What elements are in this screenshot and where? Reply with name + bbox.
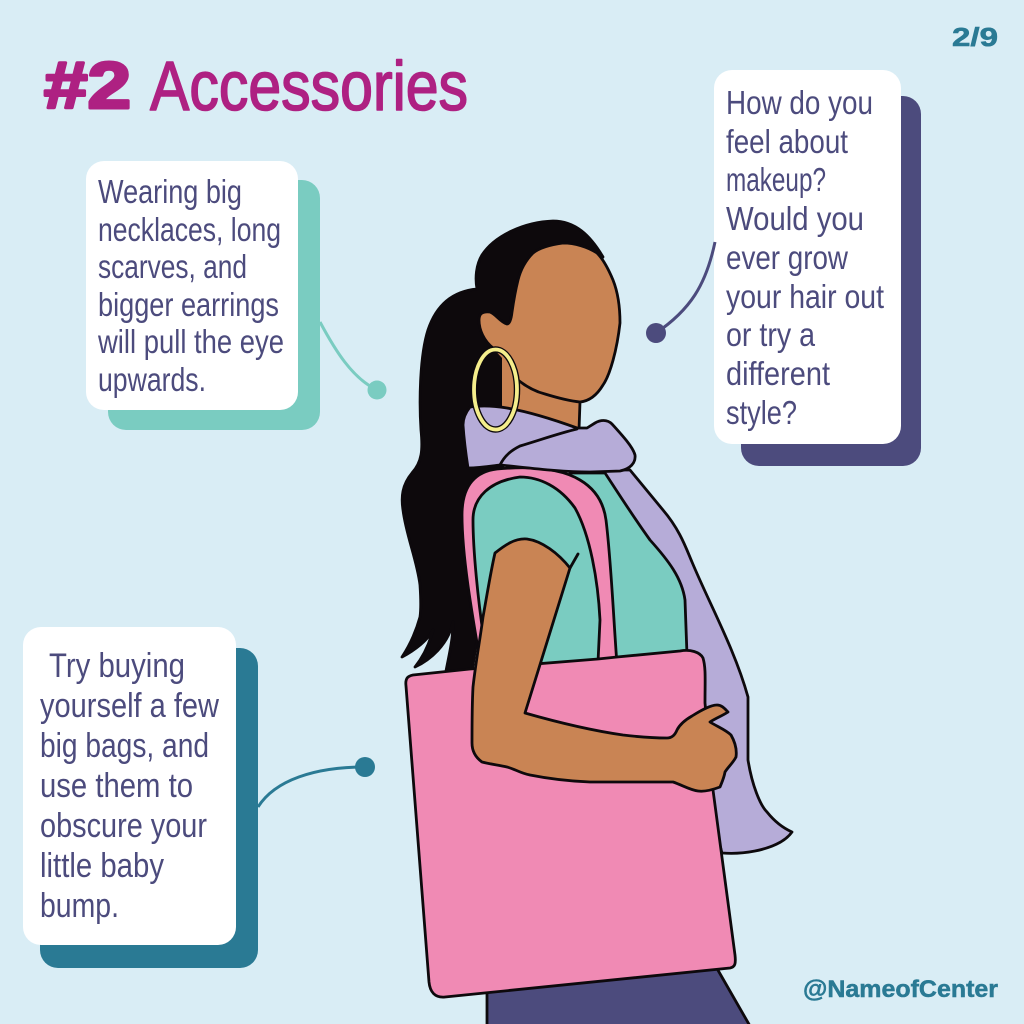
question text <box>726 84 884 431</box>
shirt under strap <box>473 477 600 672</box>
illustration: woman with tote bag and scarf <box>402 221 792 1024</box>
question text: your hair out <box>726 278 884 315</box>
question text: makeup? <box>726 161 826 198</box>
handle: @NameofCenter <box>803 976 998 1003</box>
shirt right panel <box>570 473 687 665</box>
tip text: obscure your <box>40 807 207 845</box>
question text: feel about <box>726 123 848 160</box>
scarf tail <box>600 470 792 853</box>
panel card <box>23 627 236 945</box>
title: #2 <box>44 48 131 122</box>
hoop earring <box>474 350 517 430</box>
panel: necklaces tip <box>86 161 320 430</box>
tip text: scarves, and <box>98 248 247 285</box>
tip text: bump. <box>40 887 119 925</box>
hair <box>402 221 603 672</box>
panel shadow <box>108 180 320 430</box>
connector: necklaces tip <box>320 322 386 400</box>
tip text: upwards. <box>98 361 206 398</box>
tip text: necklaces, long <box>98 211 281 248</box>
tip text: will pull the eye <box>97 323 284 360</box>
question text: Would you <box>726 200 864 237</box>
tote bag <box>406 650 735 997</box>
connector: makeup question <box>646 242 715 343</box>
tip text: big bags, and <box>40 727 209 765</box>
tip text <box>97 173 284 398</box>
panel card <box>714 70 901 444</box>
tip text: bigger earrings <box>98 286 279 323</box>
arm and hand <box>472 539 736 791</box>
panel shadow <box>40 648 258 968</box>
tip text: yourself a few <box>40 687 219 725</box>
question text: ever grow <box>726 239 848 276</box>
panel: big bags tip <box>23 627 258 968</box>
question text: style? <box>726 394 797 431</box>
trousers <box>487 965 750 1024</box>
tip text: use them to <box>40 767 193 805</box>
tip text: Wearing big <box>98 173 242 210</box>
panel shadow <box>741 96 921 466</box>
panel: makeup question <box>714 70 921 466</box>
title <box>44 47 468 125</box>
bag strap <box>462 468 617 672</box>
sleeve tick <box>570 554 578 568</box>
tip text <box>40 647 219 925</box>
page number: 2/9 <box>952 22 998 52</box>
title: Accessories <box>150 47 468 125</box>
face and neck skin <box>479 243 620 434</box>
question text: different <box>726 355 830 392</box>
question text: How do you <box>726 84 873 121</box>
tip text: little baby <box>40 847 165 885</box>
question text: or try a <box>726 316 816 353</box>
face outline <box>479 243 620 430</box>
scarf around neck <box>463 406 635 472</box>
connector: big bags tip <box>258 757 375 807</box>
tip text: Try buying <box>49 647 185 685</box>
panel card <box>86 161 298 410</box>
